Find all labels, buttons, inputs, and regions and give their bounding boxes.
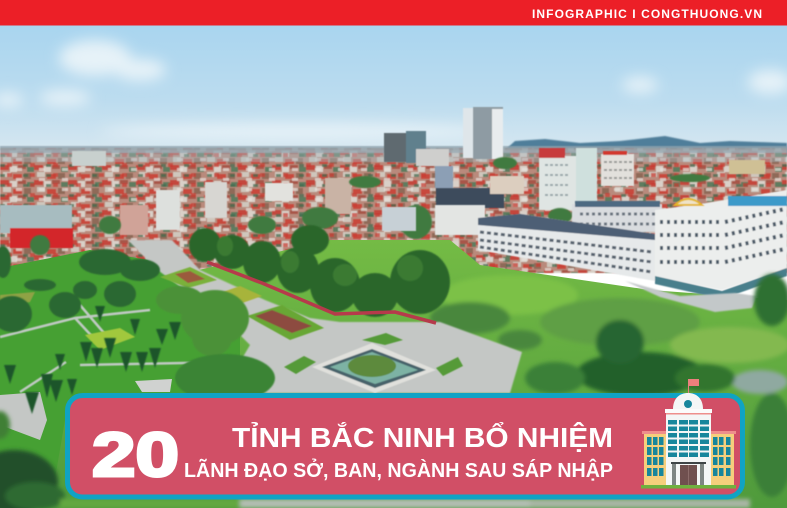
header bar (0, 0, 787, 26)
park trees (0, 246, 275, 414)
plaza pavement (128, 240, 522, 393)
tree line (189, 225, 450, 317)
dome (665, 393, 712, 414)
entrance (671, 462, 706, 485)
road beside hotel (625, 281, 757, 312)
header label: INFOGRAPHIC I CONGTHUONG.VN (532, 7, 762, 21)
long hotel wing (478, 214, 655, 281)
flower beds (0, 267, 324, 350)
big number 20: 20 (92, 421, 179, 490)
hotel buildings (382, 190, 787, 299)
windows (647, 420, 730, 476)
plaza fountain (284, 333, 463, 393)
bottom left foliage (0, 411, 750, 508)
hedges (284, 356, 316, 374)
left park lawn (0, 250, 240, 508)
far green patches (30, 157, 710, 255)
title banner (68, 396, 742, 497)
ground strip (641, 485, 736, 488)
distant hills (505, 136, 787, 156)
mid-rise buildings (0, 107, 765, 248)
red fence (207, 262, 436, 323)
icon: government building (641, 379, 736, 488)
heading line 2: LÃNH ĐẠO SỞ, BAN, NGÀNH SAU SÁP NHẬP (184, 458, 613, 482)
park paths (0, 305, 235, 392)
tall tower (463, 107, 503, 159)
corner hotel block (655, 190, 787, 299)
central tower (666, 412, 711, 486)
sky with clouds (0, 26, 787, 150)
red signboard building (0, 205, 73, 248)
banner panel (68, 396, 742, 497)
twin blocks (384, 131, 449, 166)
side wings (642, 431, 736, 486)
white tower (539, 148, 597, 210)
ground grass right (0, 240, 787, 508)
distant city (0, 146, 787, 273)
heading line 1: TỈNH BẮC NINH BỔ NHIỆM (232, 421, 613, 453)
flag (688, 379, 699, 394)
building behind hotel (382, 201, 662, 235)
right greenery (430, 274, 787, 497)
